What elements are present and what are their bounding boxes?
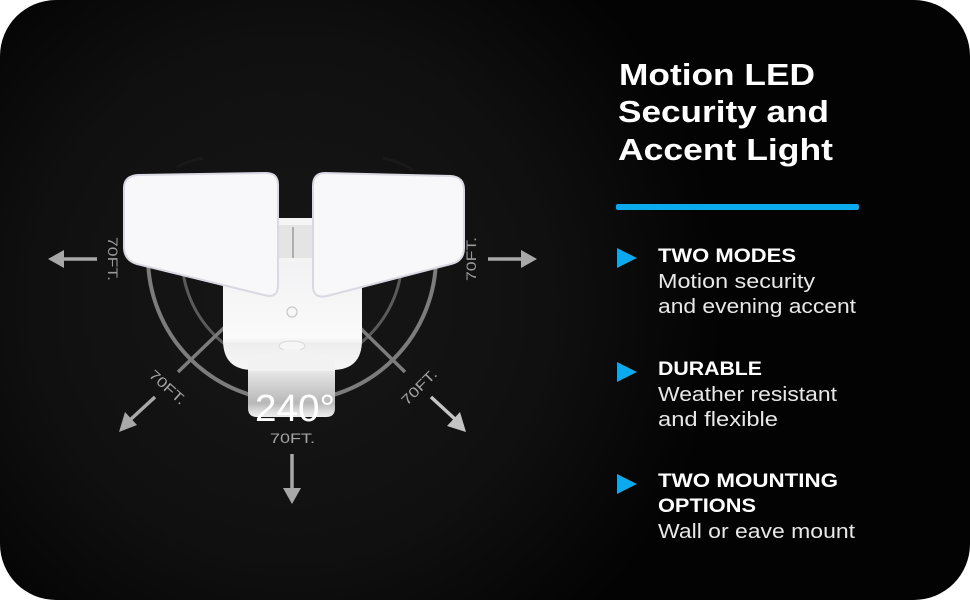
coverage diagram: arcs and crosshair lines — [148, 158, 436, 401]
description: two modes: and evening accent — [658, 296, 857, 318]
icon: bullet triangle — [617, 248, 637, 268]
feature: two mounting options — [617, 471, 855, 543]
arrowhead: lower right — [447, 412, 466, 432]
label: 70ft bottom: 70FT. — [270, 430, 315, 446]
heading: two mounting options: OPTIONS — [658, 496, 756, 517]
description: two mounting options: Wall or eave mount — [658, 521, 855, 543]
right lamp panel — [313, 173, 464, 297]
description: two modes: Motion security — [658, 271, 815, 293]
title: Security and — [618, 94, 829, 129]
arrow: lower right — [431, 397, 456, 420]
feature: durable — [617, 359, 837, 431]
heading: two mounting options: TWO MOUNTING — [658, 471, 838, 492]
product: security light — [124, 173, 464, 417]
title: Motion LED — [619, 57, 815, 92]
arrowhead: bottom — [283, 488, 301, 504]
icon: bullet triangle — [617, 474, 637, 494]
icon: bullet triangle — [617, 362, 637, 382]
motion sensor — [248, 349, 335, 417]
arrow: bottom — [290, 454, 294, 488]
main body — [223, 262, 362, 370]
arrow: left — [64, 257, 97, 261]
arrow: lower left — [130, 397, 155, 420]
label: 70ft lower right: 70FT. — [398, 366, 440, 408]
left lamp panel — [124, 173, 278, 296]
arrowhead: right — [521, 250, 537, 268]
heading: two modes: TWO MODES — [658, 246, 796, 267]
arrowhead: left — [48, 250, 64, 268]
label: 240 degrees: 240° — [255, 388, 335, 430]
description: durable: Weather resistant — [658, 384, 837, 406]
description: durable: and flexible — [658, 409, 778, 431]
label: 70ft left: 70FT. — [105, 237, 121, 281]
title — [618, 57, 833, 167]
description: two modes — [658, 271, 857, 318]
label: 70ft lower left: 70FT. — [146, 366, 189, 408]
label: 70ft right: 70FT. — [463, 237, 479, 281]
title: Accent Light — [618, 132, 833, 167]
neck mount — [277, 218, 314, 264]
divider bar — [616, 204, 859, 210]
feature: two modes — [617, 246, 857, 318]
description: durable — [658, 384, 837, 431]
heading: durable: DURABLE — [658, 359, 762, 380]
arrowhead: lower left — [119, 412, 137, 432]
heading: two mounting options — [658, 471, 838, 517]
arrow: right — [488, 257, 522, 261]
